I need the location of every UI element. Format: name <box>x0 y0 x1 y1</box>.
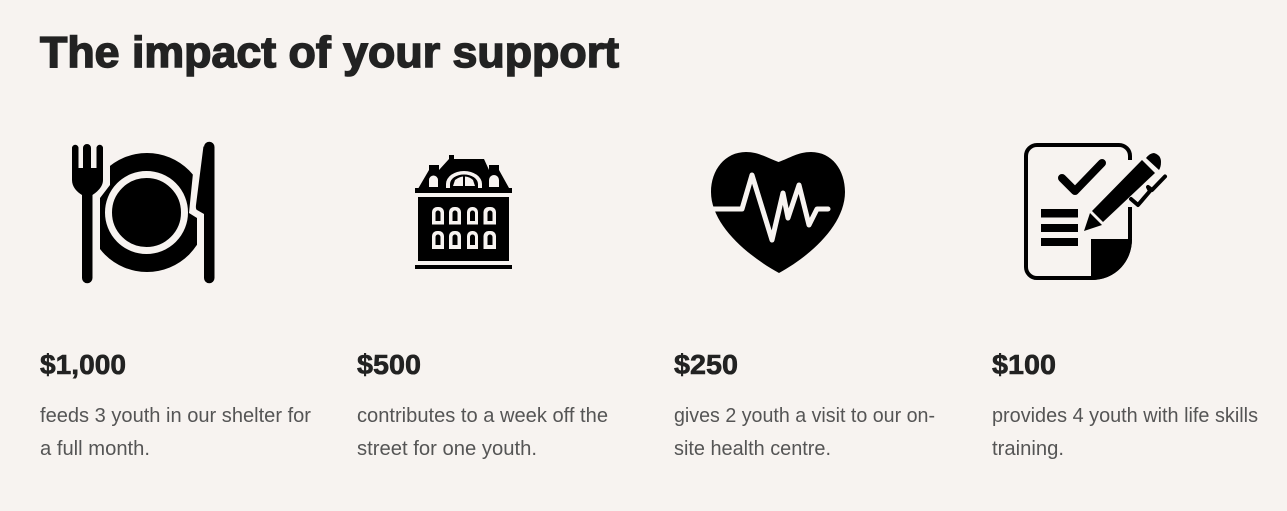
description: training. <box>992 437 1064 460</box>
panel: $500 shelter <box>357 155 608 460</box>
description: feeds 3 youth in our shelter for <box>40 404 311 427</box>
description: contributes to a week off the <box>357 404 608 427</box>
description: site health centre. <box>674 437 831 460</box>
amount: $1,000 <box>40 349 126 380</box>
description <box>40 404 311 460</box>
title: The impact of your support <box>40 28 619 77</box>
icon: plate with fork and knife <box>72 142 214 283</box>
amount: $250 <box>674 349 738 380</box>
panel: $1,000 meals <box>40 142 311 460</box>
description: provides 4 youth with life skills <box>992 404 1258 427</box>
description: a full month. <box>40 437 150 460</box>
panel: $250 health <box>674 152 935 460</box>
icon: checklist and pen <box>1026 145 1165 280</box>
amount: $100 <box>992 349 1056 380</box>
icon: building <box>415 155 512 269</box>
description <box>992 404 1258 460</box>
amount: $500 <box>357 349 421 380</box>
description <box>357 404 608 460</box>
description: street for one youth. <box>357 437 537 460</box>
description <box>674 404 935 460</box>
panel: $100 training <box>992 145 1258 460</box>
icon: heart with pulse <box>711 152 845 273</box>
description: gives 2 youth a visit to our on- <box>674 404 935 427</box>
windows <box>432 207 496 249</box>
